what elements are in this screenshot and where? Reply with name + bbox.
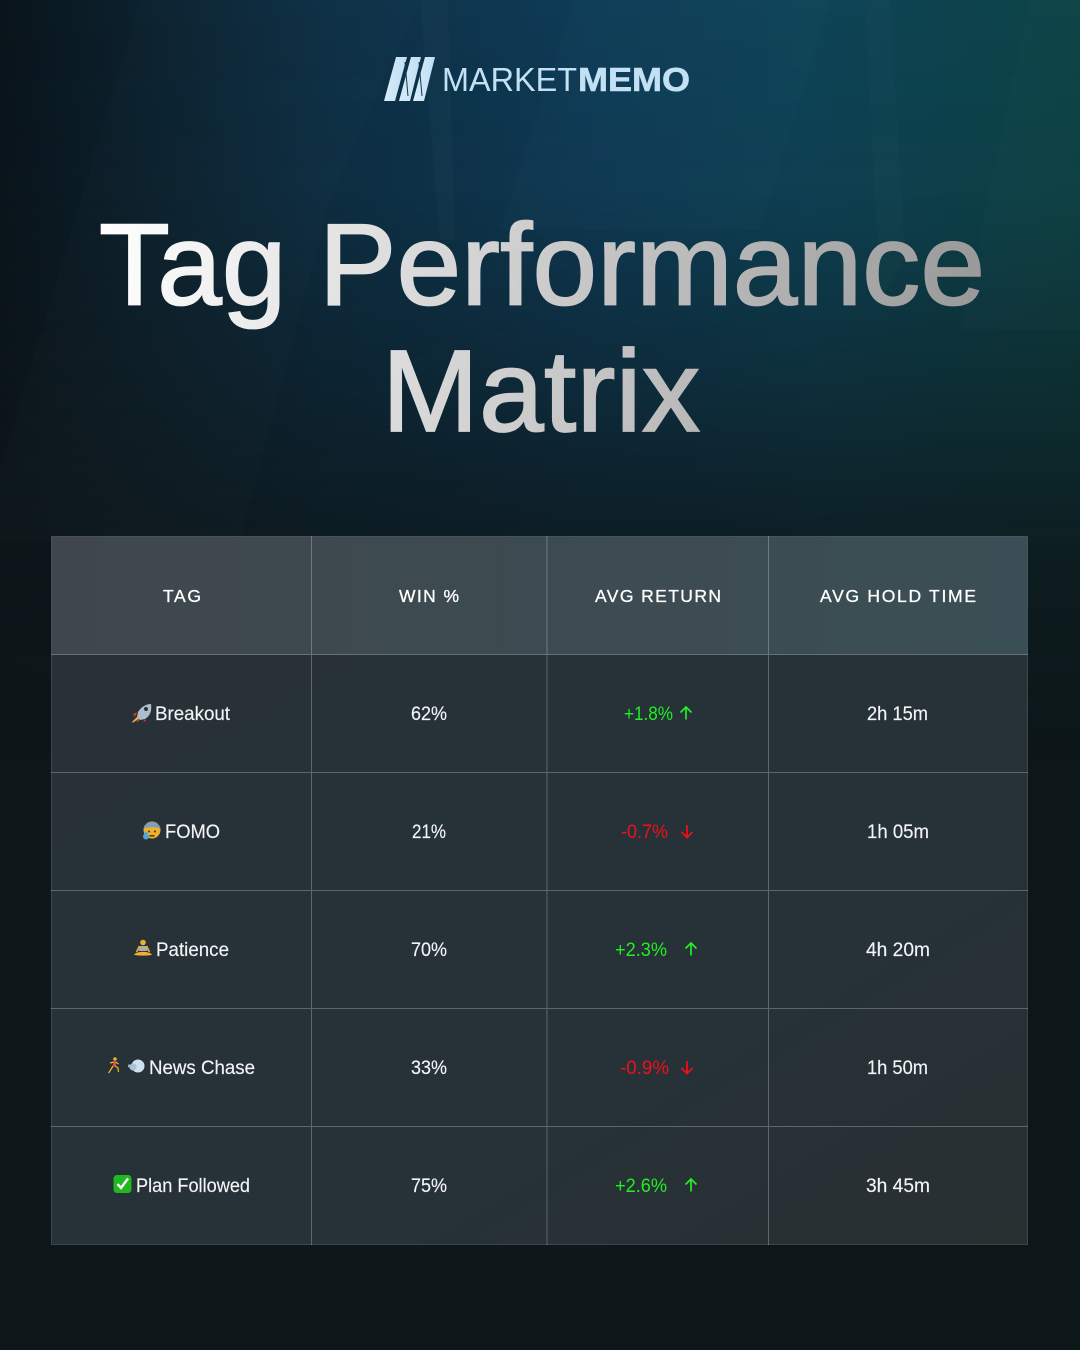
row: FOMO: FOMO <box>165 821 220 843</box>
table header row: AVG HOLD TIME <box>820 586 976 606</box>
row: News Chase <box>108 1057 928 1079</box>
row: Plan Followed <box>114 1175 930 1197</box>
background <box>46 0 1080 550</box>
row: Patience: 70% <box>411 939 447 961</box>
row: News Chase: 33% <box>411 1057 447 1079</box>
table header row: TAG <box>163 586 201 606</box>
row: FOMO: -0.7% <box>621 821 668 843</box>
row: Breakout <box>132 703 928 725</box>
row: Patience: 4h 20m <box>866 939 930 961</box>
title: Matrix <box>382 326 700 456</box>
arrow: down <box>682 825 692 838</box>
logo <box>384 57 690 101</box>
row: News Chase: News Chase <box>149 1057 255 1079</box>
row: Breakout: +1.8% <box>624 703 673 725</box>
row: Breakout: 62% <box>411 703 447 725</box>
title: Tag Performance <box>99 200 985 330</box>
row: FOMO <box>143 821 929 843</box>
arrow: up <box>686 943 696 956</box>
row: Patience <box>134 939 930 961</box>
logo wordmark: MEMO <box>578 62 690 99</box>
row: News Chase: -0.9% <box>620 1057 669 1079</box>
arrow: up <box>680 707 692 720</box>
row: Plan Followed: +2.6% <box>615 1175 667 1197</box>
icon: check mark <box>114 1175 132 1193</box>
row: Breakout: Breakout <box>155 703 231 725</box>
arrow: down <box>682 1061 692 1074</box>
icon: runner and dash <box>108 1057 144 1073</box>
row: Plan Followed: Plan Followed <box>136 1175 250 1197</box>
icon: rocket <box>132 704 151 723</box>
row: News Chase: 1h 50m <box>867 1057 928 1079</box>
performance table <box>51 536 1028 1245</box>
icon: anxious face <box>143 822 160 840</box>
row: Patience: +2.3% <box>615 939 667 961</box>
row: FOMO: 1h 05m <box>867 821 929 843</box>
row: Plan Followed: 75% <box>411 1175 447 1197</box>
row: FOMO: 21% <box>412 821 446 843</box>
arrow: up <box>686 1179 696 1192</box>
table body background <box>52 654 1028 1244</box>
table header row <box>52 536 1028 654</box>
icon: meditating person <box>134 940 152 956</box>
table header row: WIN % <box>399 586 459 606</box>
table header row: AVG RETURN <box>595 586 721 606</box>
logo wordmark: MARKET <box>442 62 577 99</box>
row: Plan Followed: 3h 45m <box>866 1175 930 1197</box>
icon: logo bars <box>384 57 435 101</box>
row: Breakout: 2h 15m <box>867 703 928 725</box>
row: Patience: Patience <box>156 939 229 961</box>
title <box>99 200 985 456</box>
